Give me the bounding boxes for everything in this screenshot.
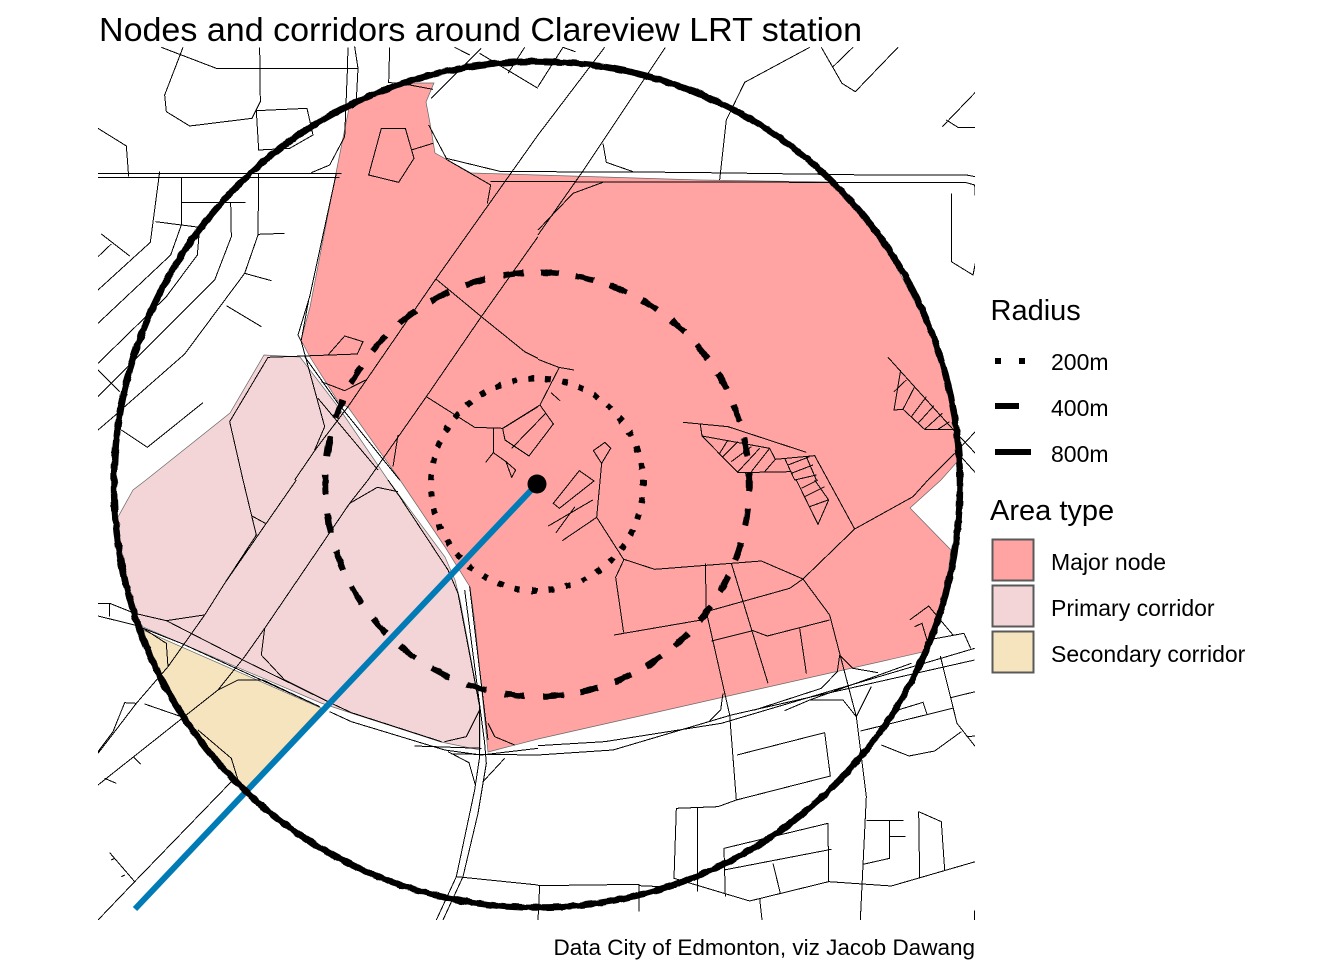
legend title: area type: Area type: [990, 495, 1114, 527]
radius ring: 800m: [114, 62, 960, 908]
map panel: [98, 47, 975, 920]
area: major node: [301, 83, 958, 752]
legend key: major node: [992, 540, 1166, 580]
radius ring: 200m: [423, 370, 651, 599]
legend key: 400m: [995, 395, 1109, 421]
title: Nodes and corridors around Clareview LRT station: [99, 12, 862, 49]
radius ring: 400m: [325, 272, 749, 696]
legend key: 200m: [995, 349, 1109, 375]
rail line: [135, 484, 537, 909]
area: primary corridor: [118, 355, 480, 750]
legend key: primary corridor: Primary corridor: [1051, 595, 1215, 621]
area: secondary corridor: [143, 630, 321, 788]
legend key: 800m: 800m: [1051, 441, 1109, 467]
legend: area type: [990, 495, 1246, 672]
caption: Data City of Edmonton, viz Jacob Dawang: [554, 935, 975, 960]
legend key: secondary corridor: Secondary corridor: [1051, 641, 1246, 667]
legend key: 800m: [995, 441, 1109, 467]
legend key: 200m: 200m: [1051, 349, 1109, 375]
legend key: primary corridor: [992, 586, 1215, 626]
legend key: 400m: 400m: [1051, 395, 1109, 421]
legend title: radius: Radius: [990, 295, 1081, 327]
legend key: secondary corridor: [992, 632, 1246, 672]
station marker: [528, 474, 546, 494]
legend: radius: [990, 295, 1109, 467]
roads: north-east: [538, 47, 975, 480]
roads: south-west: [98, 480, 538, 920]
roads: south-east: [538, 480, 975, 920]
legend key: major node: Major node: [1051, 549, 1166, 575]
roads: north-west: [98, 47, 538, 480]
road network: [98, 47, 975, 920]
roads: around the station: [486, 367, 624, 560]
